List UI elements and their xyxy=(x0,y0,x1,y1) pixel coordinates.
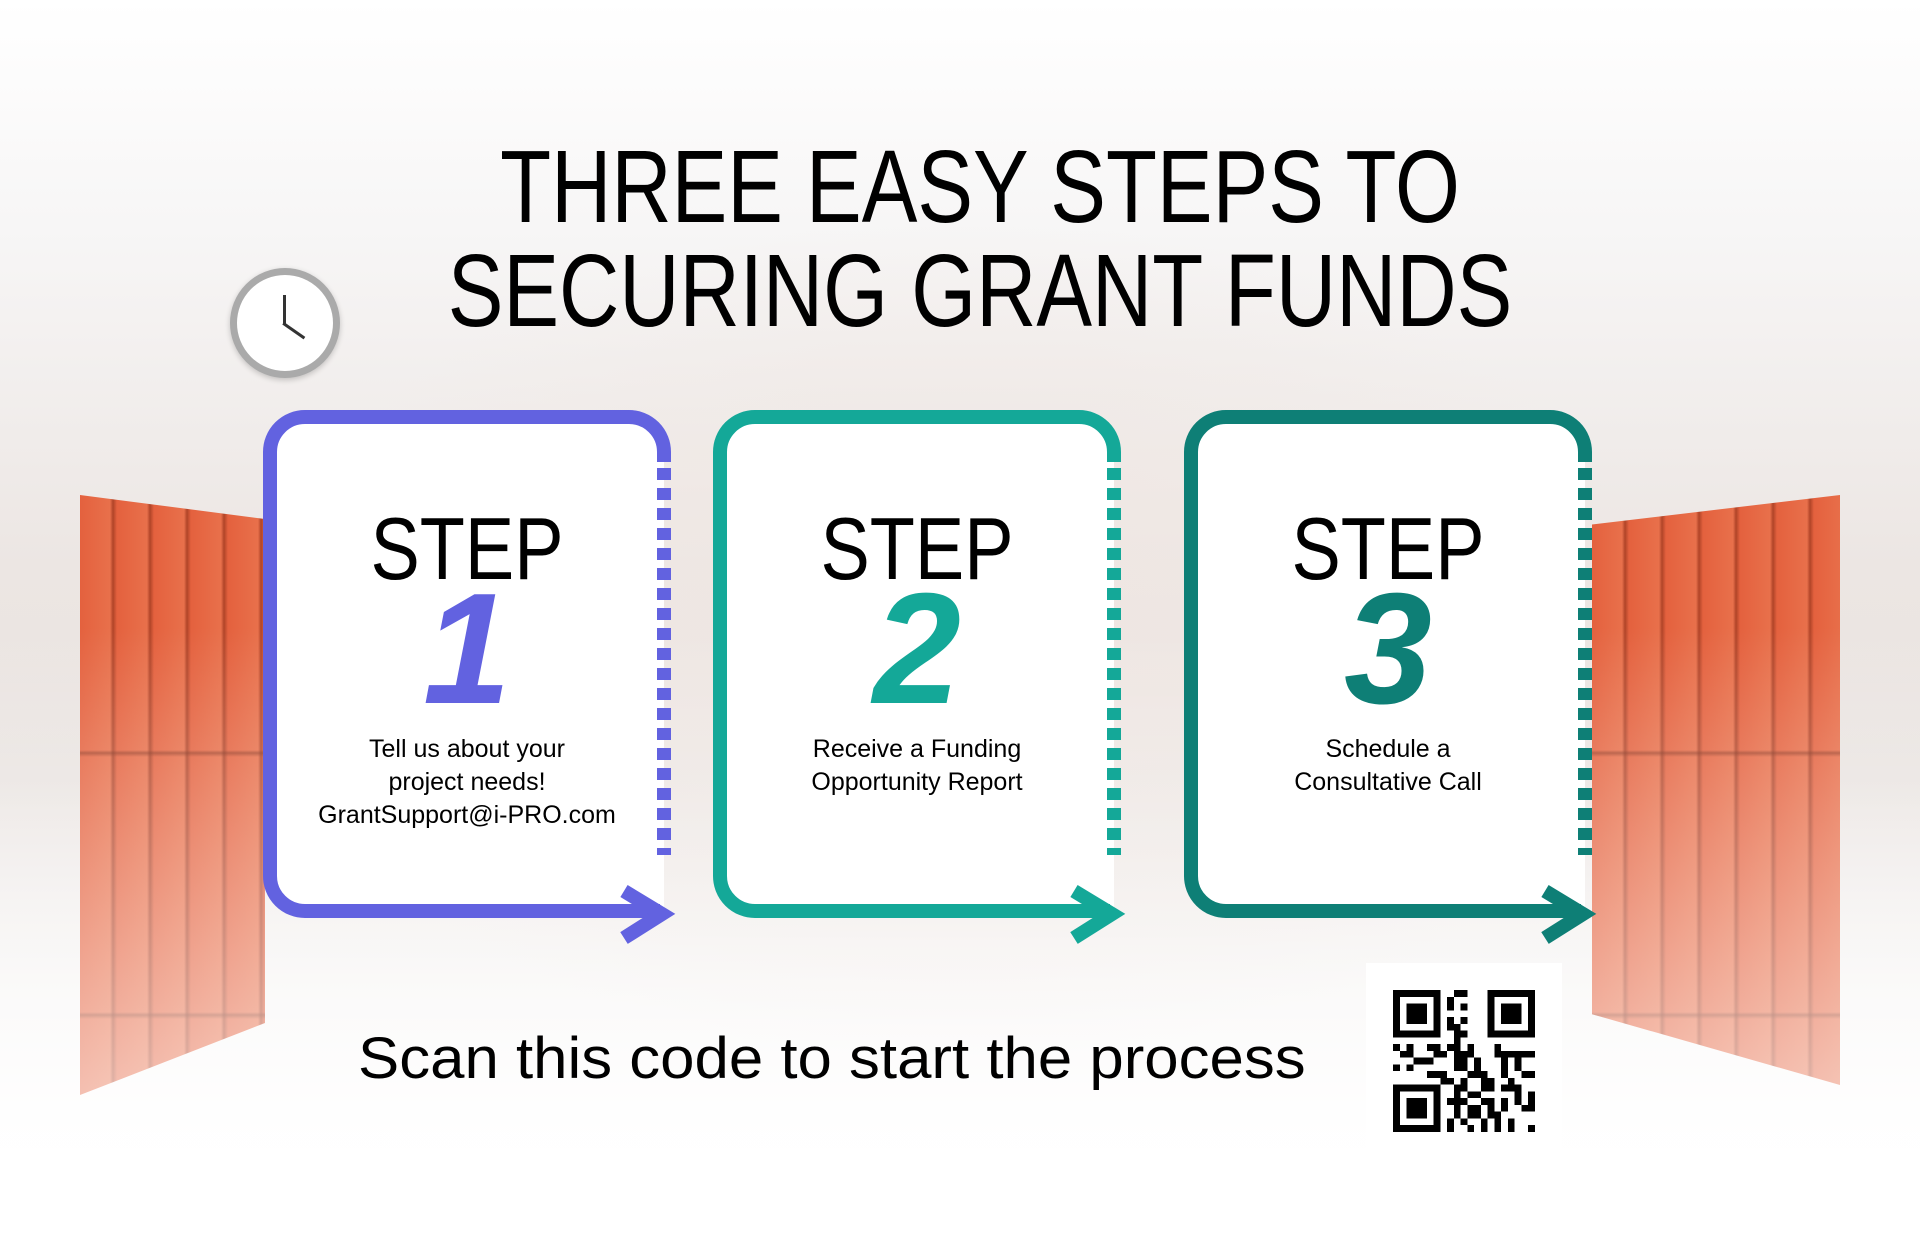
lockers right xyxy=(1592,495,1840,1085)
card: step 3: Consultative Call xyxy=(1294,768,1482,796)
card: step 1: 1 xyxy=(423,561,511,737)
card: step 1 xyxy=(263,410,676,944)
clock xyxy=(230,268,340,378)
title xyxy=(448,129,1512,348)
card: step 3: Schedule a xyxy=(1325,735,1451,763)
card: step 2: Opportunity Report xyxy=(811,768,1023,796)
card: step 3: 3 xyxy=(1344,561,1432,737)
card: step 1: STEP xyxy=(370,499,564,598)
card: step 3 xyxy=(1184,410,1596,944)
call to action text: Scan this code to start the process xyxy=(358,1026,1306,1091)
card: step 3: STEP xyxy=(1291,499,1485,598)
card: step 1: GrantSupport@i-PRO.com xyxy=(318,801,616,829)
card: step 1: project needs! xyxy=(388,768,546,796)
card: step 1: Tell us about your xyxy=(369,735,565,763)
card: step 2: STEP xyxy=(820,499,1014,598)
title: SECURING GRANT FUNDS xyxy=(448,233,1512,348)
card: step 2: 2 xyxy=(873,561,961,737)
card: step 2 xyxy=(713,410,1126,944)
lockers left xyxy=(80,495,265,1095)
title: THREE EASY STEPS TO xyxy=(500,129,1460,244)
QR code xyxy=(1366,963,1562,1157)
background: school hallway xyxy=(0,201,1920,1095)
card: step 2: Receive a Funding xyxy=(813,735,1021,763)
